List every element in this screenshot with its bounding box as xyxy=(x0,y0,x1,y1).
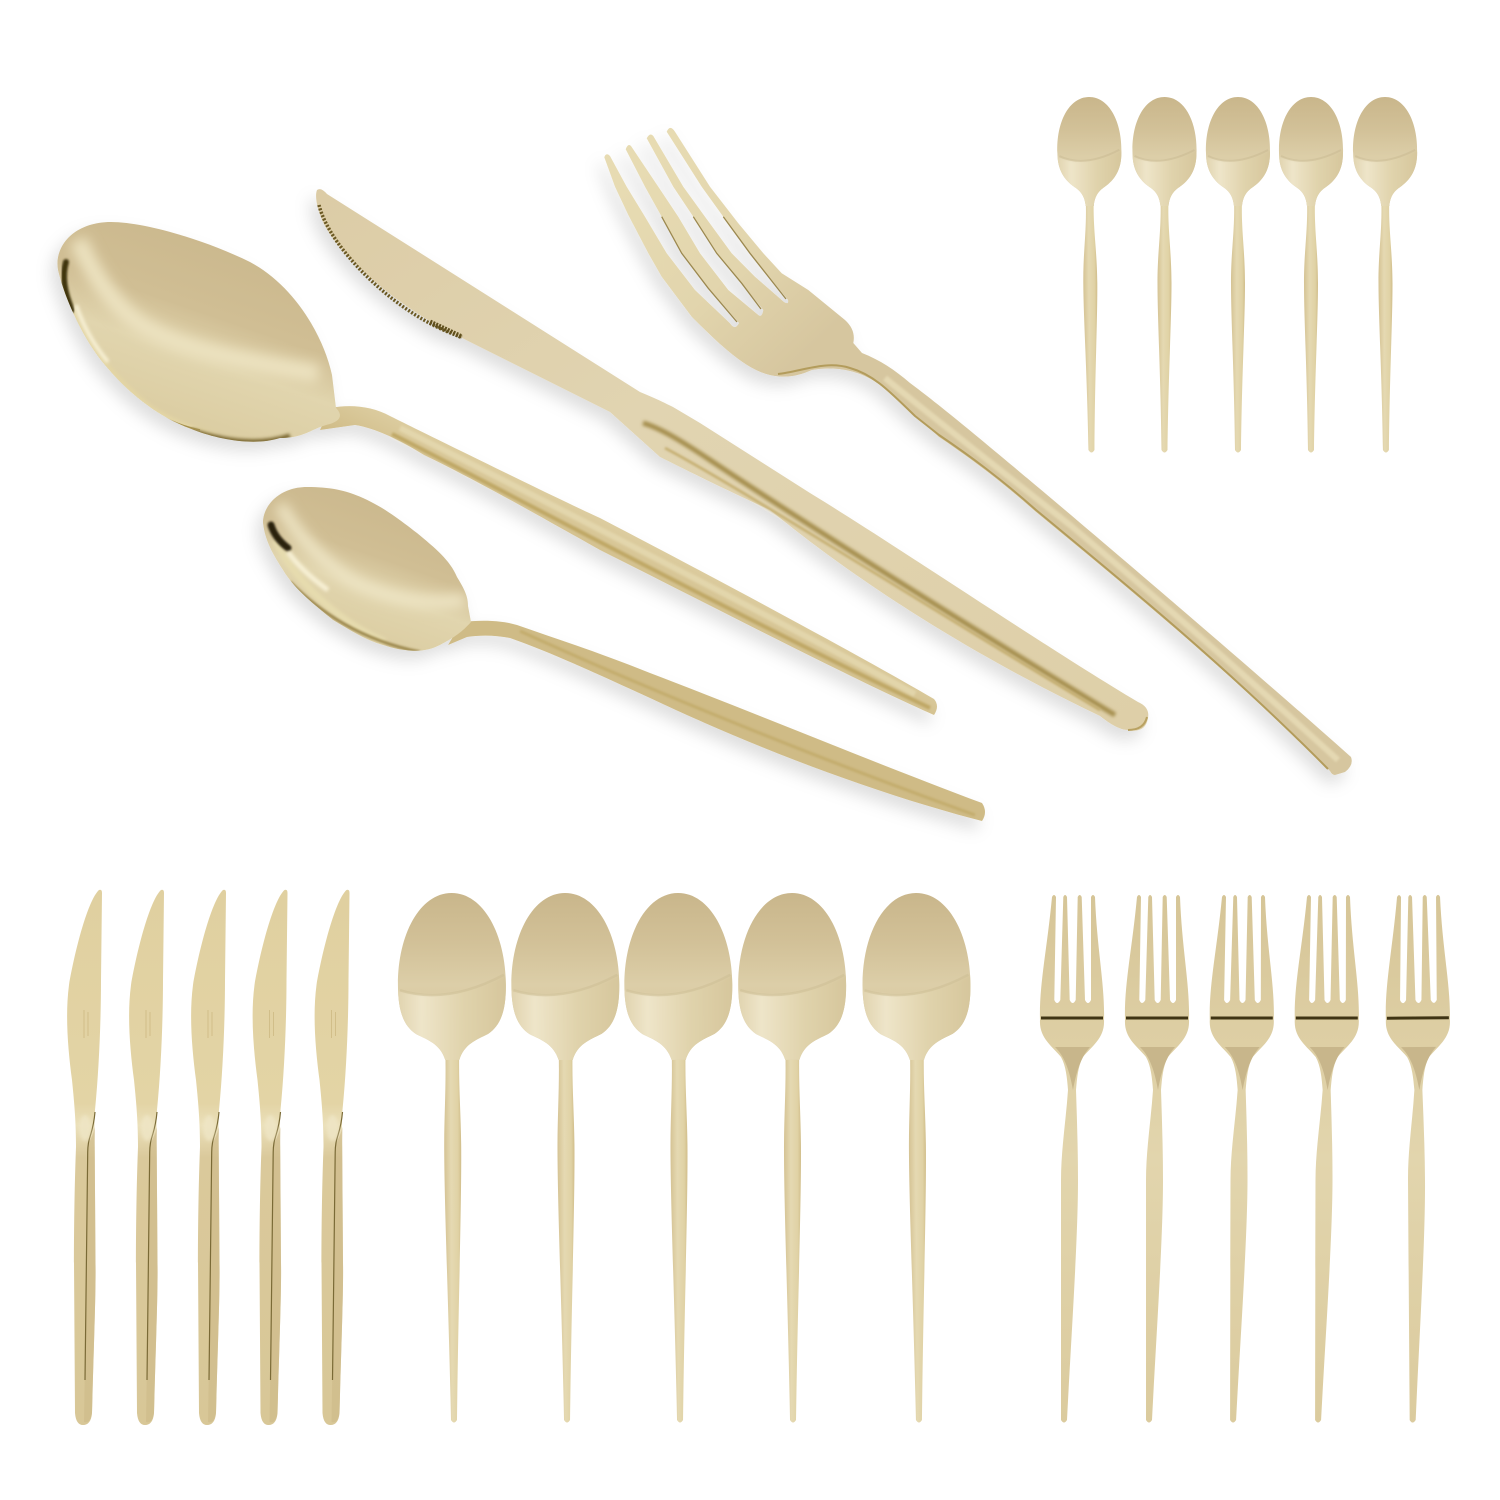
dessert spoon 2 xyxy=(510,893,622,1423)
group: five knives xyxy=(67,890,350,1425)
teaspoon 4 xyxy=(1278,97,1344,452)
teaspoon 3 xyxy=(1205,97,1271,452)
knife 2 xyxy=(129,890,164,1425)
dessert spoon 1 xyxy=(397,893,509,1423)
teaspoon 1 xyxy=(1056,97,1124,453)
fork slot dark edges xyxy=(662,217,786,322)
knife 3 xyxy=(191,890,226,1425)
dessert spoon 3 xyxy=(623,893,735,1423)
knife handle groove xyxy=(643,423,1115,715)
teaspoon 2 xyxy=(1132,97,1198,452)
fork handle lower edge xyxy=(778,365,1328,769)
fork 2 xyxy=(1125,895,1189,1422)
knife 5 xyxy=(315,890,350,1425)
fork 1 xyxy=(1040,895,1104,1422)
medium dessert spoon xyxy=(263,487,985,821)
fork 4 xyxy=(1294,895,1359,1423)
dessert spoon 4 xyxy=(737,893,848,1423)
large dinner knife xyxy=(316,189,1148,731)
group: five dessert spoons xyxy=(397,893,974,1423)
knife 1 xyxy=(67,890,102,1425)
fork 3 xyxy=(1209,895,1274,1423)
knife 4 xyxy=(253,890,288,1425)
group: five forks xyxy=(1040,895,1453,1423)
dessert spoon 5 xyxy=(861,893,974,1423)
fork 5 xyxy=(1385,895,1453,1423)
group: five teaspoons xyxy=(1056,97,1419,453)
large table spoon xyxy=(58,222,937,715)
teaspoon 5 xyxy=(1352,97,1419,453)
large dinner fork xyxy=(604,128,1352,775)
